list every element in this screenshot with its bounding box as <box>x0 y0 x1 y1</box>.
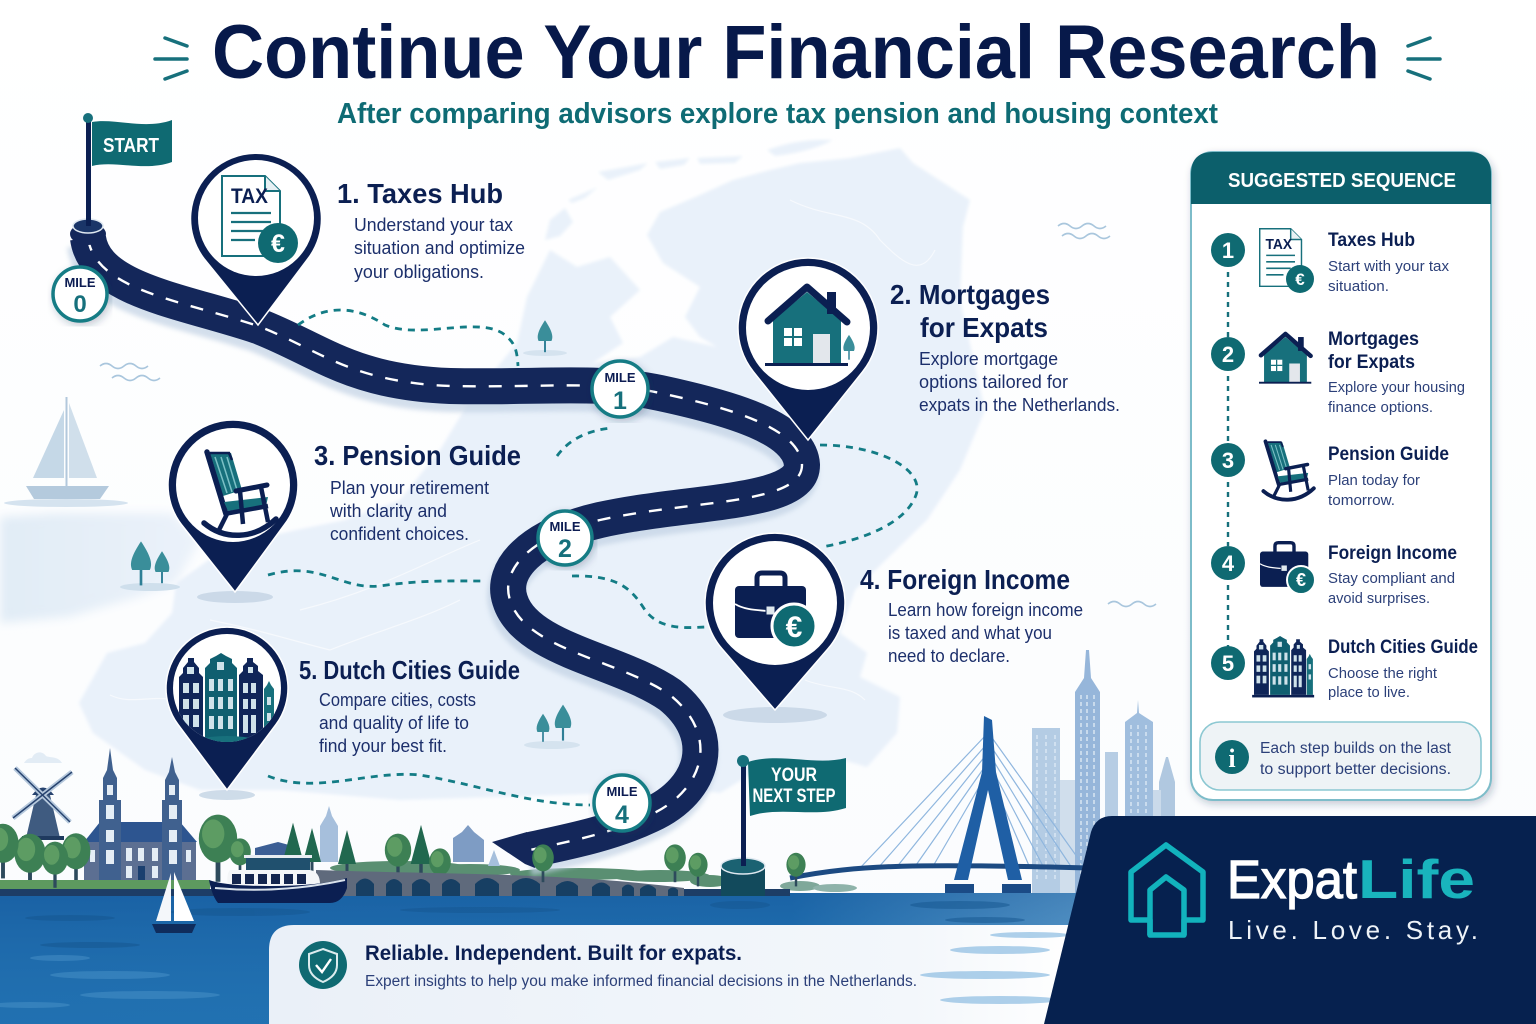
pin 3: pension <box>168 420 298 592</box>
step 1 text: 1. Taxes Hub <box>337 178 503 209</box>
tree in front of road <box>532 844 554 882</box>
step 5 text: 5. Dutch Cities Guide <box>299 655 520 685</box>
pin 2: mortgages <box>738 258 878 440</box>
sequence note: to support better decisions. <box>1260 761 1451 778</box>
panel header: SUGGESTED SEQUENCE <box>1228 170 1456 192</box>
step 5 text: find your best fit. <box>319 736 447 756</box>
quay <box>0 889 790 896</box>
start flag: START <box>103 135 159 157</box>
small sailboat <box>152 872 196 933</box>
sequence step 4: 4 <box>1222 551 1235 576</box>
icon: tax document with euro: TAX <box>231 185 268 208</box>
sequence step 5: Choose the right <box>1328 665 1438 682</box>
title: Continue Your Financial Research <box>212 10 1380 95</box>
tagline: Live. Love. Stay. <box>1228 915 1478 945</box>
step 2 text: for Expats <box>920 312 1048 343</box>
step 4 text: Learn how foreign income <box>888 600 1083 620</box>
sequence step 2: Mortgages <box>1328 329 1419 350</box>
footer banner <box>269 925 1075 1024</box>
icon: tax document with euro <box>222 176 298 263</box>
mile marker 0: MILE <box>64 275 96 290</box>
icon: shield <box>299 941 347 989</box>
step 5 text: Compare cities, costs <box>319 690 476 710</box>
mile marker 2: 2 <box>558 535 572 563</box>
decorative waves <box>100 224 1156 606</box>
step 5 text <box>299 655 520 756</box>
subtitle: After comparing advisors explore tax pension and housing context <box>337 98 1218 130</box>
lawn <box>0 880 210 890</box>
step 3 text: with clarity and <box>329 501 447 521</box>
step 1 text: situation and optimize <box>354 238 525 258</box>
step 2 text: options tailored for <box>919 372 1068 392</box>
sequence step 4 <box>1211 543 1457 607</box>
mile marker 0: 0 <box>73 291 87 318</box>
step 3 text: 3. Pension Guide <box>314 440 521 471</box>
sequence step 1: TAX <box>1265 236 1292 253</box>
connector dashes <box>268 310 917 805</box>
small cloud <box>24 752 62 763</box>
sequence note: i <box>1228 744 1236 773</box>
sequence step 4: Stay compliant and <box>1328 570 1455 587</box>
footer banner: Expert insights to help you make informed financial decisions in the Netherlands. <box>365 973 917 990</box>
ground tree <box>42 842 68 888</box>
next step flag: YOUR <box>771 765 817 786</box>
brand panel: Life <box>1358 848 1475 910</box>
ferry boat <box>209 855 347 903</box>
sequence step 2 <box>1211 329 1465 416</box>
icon: canal houses <box>179 653 274 742</box>
mile marker 4: 4 <box>615 801 629 829</box>
step 4 text: 4. Foreign Income <box>860 564 1070 595</box>
windmill <box>13 768 72 840</box>
sequence step 3: tomorrow. <box>1328 492 1395 509</box>
icon: briefcase with euro <box>735 573 816 648</box>
footer banner: Reliable. Independent. Built for expats. <box>365 942 742 965</box>
road <box>86 238 802 868</box>
icon: tax document with euro: € <box>271 230 285 258</box>
road start cap <box>70 219 106 245</box>
sequence step 5: place to live. <box>1328 684 1410 701</box>
sequence step 1: € <box>1295 270 1305 289</box>
step 2 text <box>890 279 1120 415</box>
step 2 text: Explore mortgage <box>919 349 1058 369</box>
icon: house <box>765 287 855 366</box>
stone bridge <box>316 870 684 896</box>
step 5 text: and quality of life to <box>319 713 469 733</box>
sequence step 1 <box>1211 229 1450 295</box>
step 1 text <box>337 178 525 282</box>
background trees <box>120 320 580 749</box>
mile marker 2: MILE <box>549 519 581 534</box>
pin 4: foreign income <box>705 533 845 710</box>
sequence step 3: Plan today for <box>1328 472 1420 489</box>
background sailboat <box>4 397 128 507</box>
icon: briefcase with euro: € <box>786 611 803 644</box>
logo wordmark: Expat <box>1227 850 1357 910</box>
sequence step 5: 5 <box>1222 651 1234 676</box>
mile marker 1: 1 <box>613 387 627 415</box>
cable-stayed bridge <box>790 716 1090 895</box>
sequence step 1: situation. <box>1328 278 1389 295</box>
pin 1: taxes <box>190 153 322 325</box>
icon: rocking chair <box>204 452 276 535</box>
sequence step 4: € <box>1296 570 1306 590</box>
sequence step 2: 2 <box>1222 342 1234 367</box>
step 1 text: Understand your tax <box>354 215 513 235</box>
step 2 text: expats in the Netherlands. <box>919 395 1120 415</box>
distant buildings <box>255 806 500 866</box>
sequence step 3: Pension Guide <box>1328 444 1449 465</box>
step 3 text <box>314 440 521 544</box>
sequence note <box>1200 722 1481 790</box>
mile marker 4: MILE <box>606 784 638 799</box>
sequence step 2: for Expats <box>1328 352 1415 373</box>
start flag <box>83 113 172 226</box>
mile marker 4 <box>594 775 650 831</box>
map of the Netherlands background <box>79 140 985 800</box>
step 1 text: your obligations. <box>354 262 484 282</box>
step 4 text: need to declare. <box>888 646 1010 666</box>
background foliage band <box>330 861 857 892</box>
map rivers <box>110 200 935 700</box>
sequence step 3: 3 <box>1222 448 1234 473</box>
step 4 text <box>860 564 1083 666</box>
step 3 text: Plan your retirement <box>330 478 489 498</box>
step 4 text: is taxed and what you <box>888 623 1052 643</box>
pin shadows <box>197 591 827 800</box>
water <box>0 893 1100 1024</box>
logo icon <box>1131 845 1203 935</box>
trees <box>0 815 806 888</box>
next step flag: NEXT STEP <box>752 786 836 807</box>
panel header <box>1191 152 1491 204</box>
sequence step 3 <box>1211 441 1449 509</box>
next step flag <box>721 755 846 896</box>
pin 5: dutch cities <box>166 627 288 790</box>
sequence step 2: finance options. <box>1328 399 1433 416</box>
skyline: skyscrapers <box>1032 650 1175 895</box>
church <box>84 748 197 884</box>
mile marker 2 <box>538 511 592 565</box>
map: left sea area <box>0 513 200 623</box>
step 3 text: confident choices. <box>330 524 469 544</box>
sequence step 5: Dutch Cities Guide <box>1328 637 1478 658</box>
brand panel <box>1044 816 1536 1024</box>
left skyline <box>0 748 857 933</box>
mile marker 1 <box>592 361 648 417</box>
sequence note: Each step builds on the last <box>1260 740 1452 757</box>
sequence step 4: avoid surprises. <box>1328 590 1430 607</box>
panel: suggested sequence <box>1191 152 1491 800</box>
mile marker 1: MILE <box>604 370 636 385</box>
sequence step 4: Foreign Income <box>1328 543 1457 564</box>
title ornament left <box>155 38 187 79</box>
sequence step 2: Explore your housing <box>1328 379 1465 396</box>
sequence step 1: Taxes Hub <box>1328 230 1415 251</box>
mile marker 0 <box>53 267 107 321</box>
sequence step 1: Start with your tax <box>1328 258 1450 275</box>
sequence step 1: 1 <box>1222 238 1234 263</box>
step 2 text: 2. Mortgages <box>890 279 1050 310</box>
sequence step 5 <box>1211 636 1478 701</box>
title ornament right <box>1408 38 1440 79</box>
